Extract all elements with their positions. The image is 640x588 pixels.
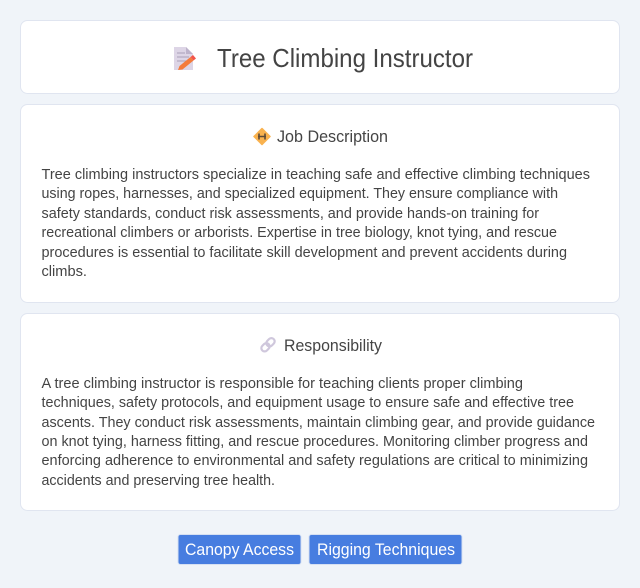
icon: chain link xyxy=(260,337,276,353)
text block: responsibility xyxy=(42,376,595,489)
text block: job description: safety standards, conduct risk assessments, and provide hands-on training for xyxy=(42,206,539,222)
text block: responsibility: techniques, safety protocols, and equipment usage to ensure safe and effective tree xyxy=(42,395,574,411)
text block: responsibility: on knot tying, harness fitting, and rescue procedures. Monitoring climber progress and xyxy=(42,434,588,450)
title: Tree Climbing Instructor xyxy=(217,43,473,73)
text block: responsibility: accidents and preserving tree health. xyxy=(42,473,275,489)
tag button: canopy access xyxy=(178,534,301,564)
tag button: canopy access: Canopy Access xyxy=(185,540,294,559)
panel: job description xyxy=(20,104,620,302)
heading: responsibility: Responsibility xyxy=(284,336,382,355)
icon: memo with pencil xyxy=(174,47,196,70)
text block: job description: climbs. xyxy=(42,264,87,280)
text block: job description: Tree climbing instructors specialize in teaching safe and effective climbing techniques xyxy=(42,167,590,183)
text block: responsibility: A tree climbing instructor is responsible for teaching clients proper climbing xyxy=(42,376,523,392)
text block: responsibility: ascents. They conduct risk assessments, maintain climbing gear, and provide guidance xyxy=(42,415,595,431)
text block: responsibility: enforcing adherence to environmental and safety regulations are critical to minimizing xyxy=(42,453,588,469)
heading: job description: Job Description xyxy=(277,127,388,146)
panel: title card xyxy=(20,20,620,94)
text block: job description: recreational climbers or arborists. Expertise in tree biology, knot tying, and rescue xyxy=(42,225,557,241)
panel: responsibility xyxy=(20,314,620,510)
text block: job description: procedures is essential to facilitate skill development and prevent accidents during xyxy=(42,245,567,261)
tag button: rigging techniques xyxy=(309,534,462,564)
tag button: rigging techniques: Rigging Techniques xyxy=(317,540,455,559)
text block: job description: using ropes, harnesses, and specialized equipment. They ensure compliance with xyxy=(42,186,558,202)
icon: construction diamond sign xyxy=(254,128,270,144)
text block: job description xyxy=(42,167,590,280)
